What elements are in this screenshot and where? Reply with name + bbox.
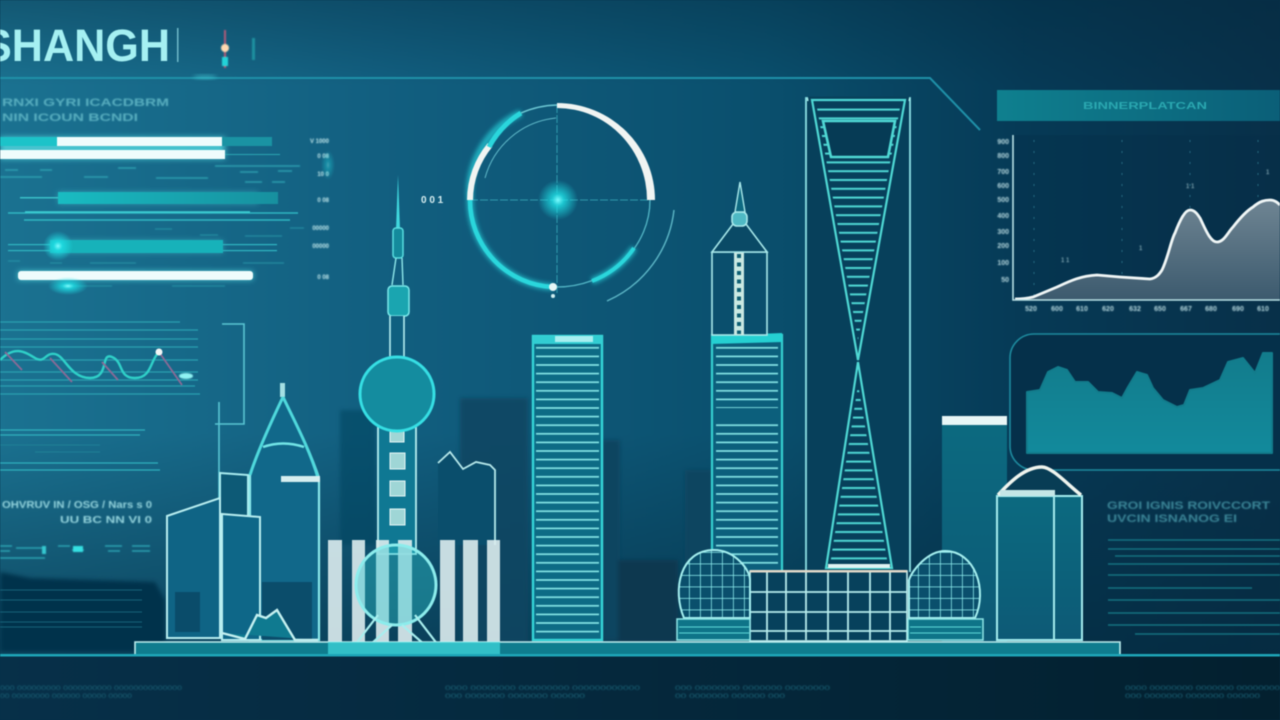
white columns [328,540,500,652]
point markers: 1 [1139,246,1143,252]
building: wave top [438,452,497,545]
frame [806,98,910,572]
right caption: UVCIN ISNANOG EI [1107,513,1237,525]
y labels: 500 [997,197,1009,204]
right mid building [942,416,1007,642]
lower stripes [716,346,778,570]
bar value labels: 00000 [312,226,330,232]
bar 4 [8,231,277,261]
teal cap [711,333,782,344]
chart grid lines [0,322,200,394]
y labels [997,139,1009,284]
footer text: 00 0000000 000000 000 [675,694,786,700]
footer text: 000 00000000 0000000 00000000 [675,686,831,692]
upper capsule [393,228,403,258]
axes [1013,135,1280,300]
y labels: 600 [997,183,1009,190]
x labels: 680 [1205,306,1217,313]
marker [156,348,162,356]
lower triangle fill [826,362,892,568]
title cursor divider [177,28,178,62]
dome arch [998,467,1081,495]
glowing section [328,642,500,654]
block A [167,498,220,638]
top bar [807,98,910,101]
pearl tower [360,175,434,554]
y labels: 700 [997,169,1009,176]
inner arc [485,118,556,178]
left caption [2,500,153,526]
footer text: 0000 00000000 0000000 00000000 [1125,686,1280,692]
area series [1027,353,1272,453]
node small [551,294,555,298]
x labels: 620 [1102,306,1114,313]
left dome grid [679,550,750,618]
x labels: 650 [1154,306,1166,313]
window [823,121,895,157]
header text: BINNERPLATCAN [1083,101,1207,112]
radial gauge [421,103,674,301]
spire edge highlight [250,397,318,478]
bar value labels: V 1000 [310,139,330,145]
spire [735,182,745,212]
title glow icons [221,30,255,68]
x labels: 600 [1051,306,1063,313]
panel: left bars [0,97,335,295]
bar value labels [310,139,330,281]
white arc [557,103,655,200]
right domed building [997,467,1082,640]
block B [222,514,260,640]
building body [997,496,1082,640]
right lines [1108,540,1280,634]
footer text: 00 00000000 000000 00000 00000 [0,694,133,700]
base highlight [828,564,890,568]
panel heading: NIN ICOUN BCNDI [2,112,138,124]
spire needle [280,383,285,397]
roof ledge [1000,490,1055,496]
x labels: 690 [1232,306,1244,313]
lower sphere and legs [355,545,438,645]
y labels: 50 [1001,277,1009,284]
glow under bar 5 [48,277,88,295]
footer text: 0000 00000000 000000000 000000000000 [445,686,641,692]
thin data lines [0,166,300,182]
panel: area chart [1010,334,1280,470]
pink series [5,352,182,385]
thin lower arc [557,200,650,287]
footer text: 000 0000000 0000000 000000 [1125,694,1261,700]
y labels: 100 [997,260,1009,267]
outer arc [607,210,674,301]
cyan lower right [592,248,634,281]
upper box [712,252,767,335]
x labels: 667 [1180,306,1192,313]
lower inset gap [826,362,892,568]
white left arc [470,145,490,200]
gauge arc glow [470,113,634,287]
paired lines [8,212,298,220]
point markers: 1 [1266,170,1270,176]
right dome base [908,619,983,640]
x labels: 610 [1257,306,1269,313]
spire crossbar [263,444,304,447]
bar 5 [18,271,253,280]
wave top outline [438,452,495,545]
plot backdrop [1013,135,1280,300]
left dome [679,550,750,618]
panel: top right chart [997,90,1280,313]
bracket connector [215,324,244,500]
y labels: 800 [997,153,1009,160]
windows [390,430,405,525]
right base lines [910,627,981,633]
point markers: 1 1 [1061,258,1070,264]
x labels: 632 [1129,306,1141,313]
left base lines [679,627,749,633]
line chart: lower left [0,322,200,394]
main spire tower [250,397,319,640]
area [1015,200,1280,300]
expo centre [677,550,983,641]
bar value labels: 0 08 [317,198,330,204]
central hall [750,571,907,641]
background skyline silhouettes [0,398,712,652]
central strip [734,252,744,335]
left small legend row [0,546,150,558]
gauge dots label: 0 0 1 [421,195,444,206]
right dome [909,551,980,618]
bar value labels: 00000 [312,244,330,250]
lower outline [712,335,782,570]
tower: striped block [533,336,602,640]
dark window left [175,592,200,632]
y labels: 400 [997,213,1009,220]
footer text: 000 0000000 0000000 000000 [445,694,586,700]
needle [396,175,400,230]
world financial center [806,98,910,572]
y labels: 200 [997,243,1009,250]
x labels: 610 [1076,306,1088,313]
panel heading [2,97,169,124]
chart header [997,90,1280,121]
centre glow [538,180,578,220]
upper block [220,473,248,516]
white ledge [281,476,320,482]
point markers [1061,170,1270,264]
teal series [0,351,159,378]
hill outline [222,610,318,640]
right caption [1107,500,1270,525]
left caption: UU BC NN VI 0 [60,515,153,526]
left lines group [0,430,160,470]
main sphere [360,357,434,431]
upper triangle outline [812,100,905,360]
strip dots [737,254,741,334]
base platform [135,642,1120,654]
lower shaft [378,424,416,554]
footer text [0,686,1280,700]
jin mao tower [711,182,782,570]
cyan lower arc [470,200,553,287]
hall top highlight [750,570,907,572]
lower block [712,336,782,570]
left dome base [677,619,750,640]
y labels: 900 [997,139,1009,146]
left caption: OHVRUV IN / OSG / Nars s 0 [2,500,152,511]
small pod [388,286,409,316]
dome fill [998,467,1081,496]
footer text: 000 000000000 0000000000 00000000000000 [0,686,183,692]
building group: left [167,383,320,640]
x labels [1025,306,1269,313]
curve [1015,200,1280,299]
bar value labels: 10 0 [317,172,330,178]
upper triangle fill [812,100,905,360]
right text block [1107,500,1280,634]
thin upper arc [521,105,557,113]
y labels: 300 [997,229,1009,236]
roof [712,224,767,252]
faint lines [8,228,304,286]
bar 1 [0,137,272,146]
point markers: 1 1 [1186,184,1195,190]
right caption: GROI IGNIS ROIVCCORT [1107,500,1270,512]
x labels: 520 [1025,306,1037,313]
bar 2 [0,150,280,159]
glow at labels [321,150,335,180]
dotted gridlines [1034,140,1258,300]
right dome grid [909,551,980,618]
top rule with corner [0,75,980,130]
crown [732,212,747,226]
crosshair [470,105,650,295]
bar value labels: 0 08 [317,275,330,281]
dark window right [262,582,312,640]
lower triangle outline [826,362,892,568]
left dark lines [0,590,142,627]
upper connector [392,258,403,285]
bar glow [0,137,258,280]
shaft [390,316,404,362]
end glow [179,373,193,379]
panel heading: RNXI GYRI ICACDBRM [2,97,169,109]
bar value labels: 0 08 [317,154,330,160]
node [549,283,557,291]
ground line [0,654,1280,656]
bar 3 [20,192,278,204]
cyan upper arc [489,113,521,147]
hall grid [750,571,907,640]
upper inset gap [812,100,905,360]
inner edge [1053,496,1055,640]
